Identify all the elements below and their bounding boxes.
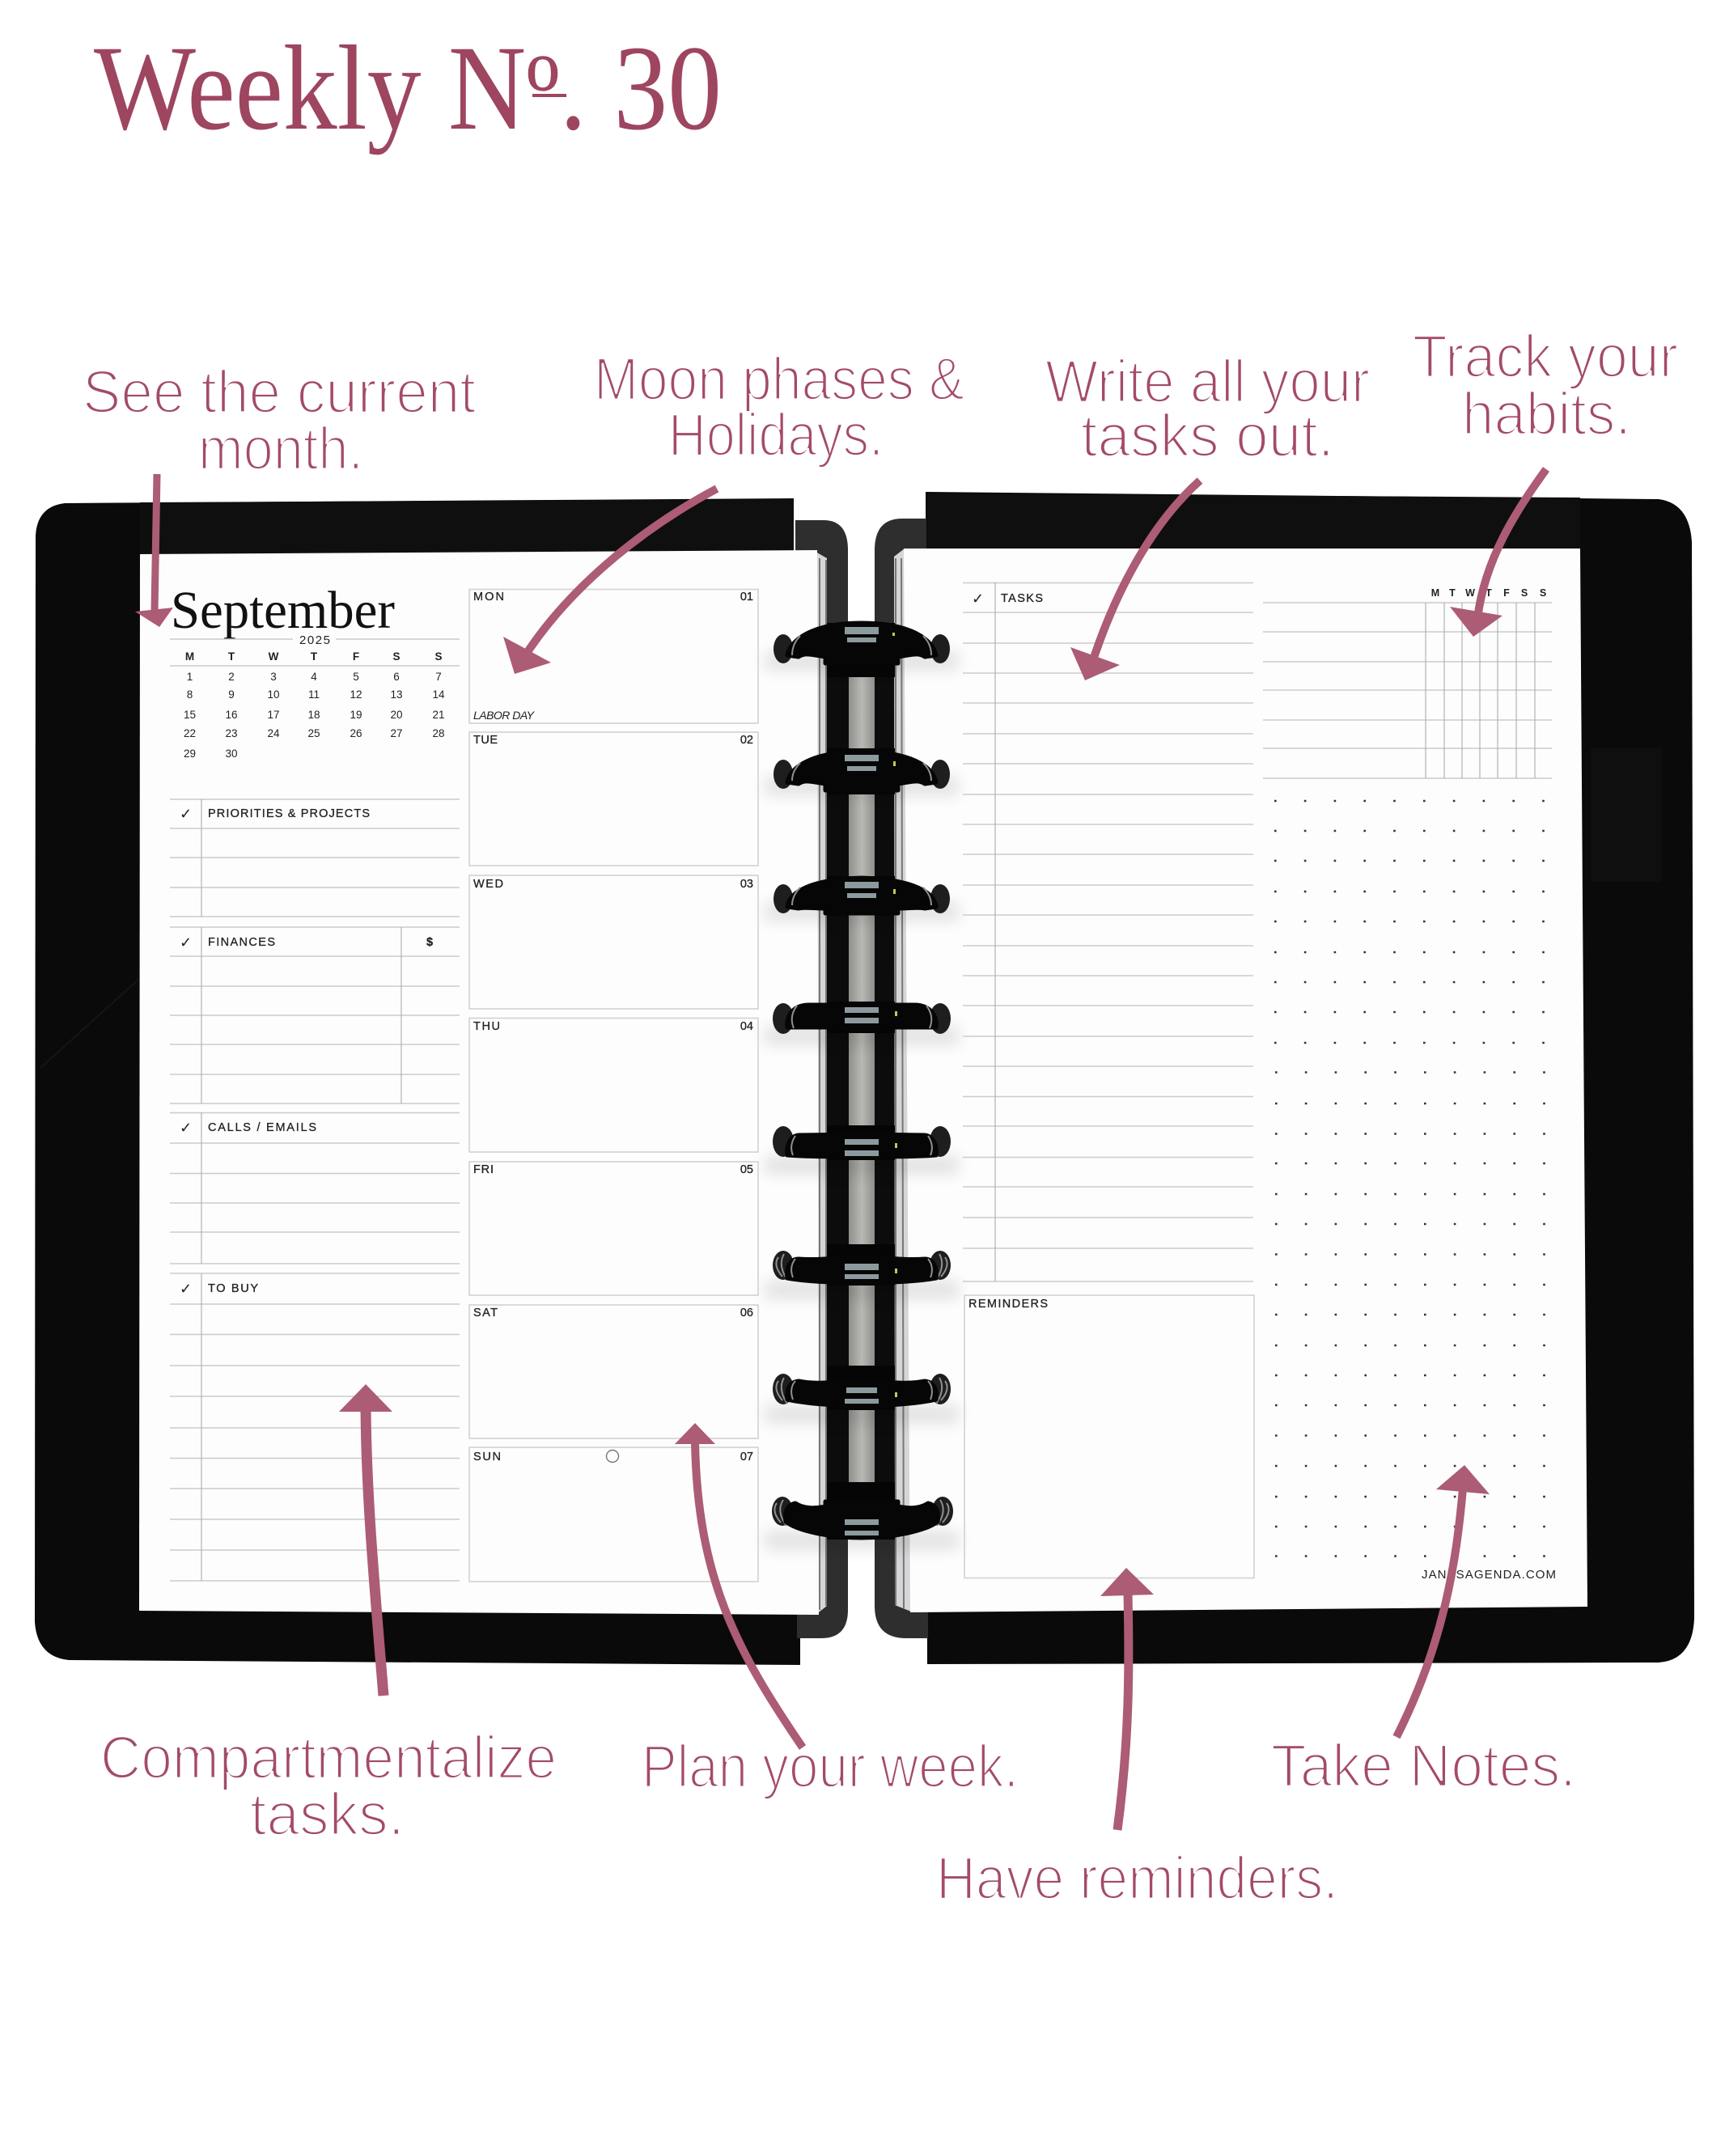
- panel: habit tracker: F: [1503, 587, 1510, 599]
- panel: finances: FINANCES: [208, 936, 275, 949]
- holiday label: LABOR DAY: [473, 709, 536, 722]
- left page: [139, 550, 819, 1615]
- arrow: have reminders: [1100, 1568, 1154, 1830]
- right page: [904, 549, 1587, 1612]
- date grid: 15: [184, 709, 196, 721]
- weekday header: W: [269, 650, 279, 663]
- date grid: 19: [350, 709, 362, 721]
- date grid: 14: [432, 688, 445, 701]
- year: 2025: [299, 633, 330, 647]
- caption: track your habits: [1413, 323, 1678, 447]
- weekday header: S: [392, 650, 401, 663]
- left bracket: [795, 520, 848, 1638]
- date grid: 12: [350, 688, 362, 701]
- elastic strap: [1591, 748, 1662, 882]
- panel: tasks: [963, 582, 1253, 1281]
- date grid: [184, 671, 445, 760]
- title: º: [526, 29, 560, 163]
- planner: open binder: [35, 492, 1694, 1665]
- date grid: 7: [435, 671, 442, 683]
- date grid: 2: [228, 671, 235, 683]
- year rule: [170, 639, 460, 666]
- date grid: 18: [307, 709, 320, 721]
- weekday header: T: [228, 650, 235, 663]
- caption: have reminders: Have reminders.: [936, 1845, 1338, 1912]
- weekday header: T: [311, 650, 318, 663]
- month heading: September: [171, 581, 395, 640]
- panel: Monday: 01: [740, 591, 753, 604]
- panel: habit tracker: S: [1521, 587, 1528, 599]
- date grid: 13: [390, 688, 403, 701]
- caption: track your habits: Track your: [1413, 323, 1678, 390]
- caption: write all your tasks out: tasks out.: [1081, 402, 1334, 469]
- caption: take notes: Take Notes.: [1271, 1732, 1576, 1799]
- panel: habit tracker: S: [1540, 587, 1546, 599]
- weekday header: F: [353, 650, 359, 663]
- date grid: 16: [225, 709, 238, 721]
- panel: Saturday: SAT: [473, 1307, 498, 1319]
- ring 1: [773, 623, 950, 663]
- date grid: 9: [228, 688, 235, 701]
- panel: habit tracker: M: [1431, 587, 1439, 599]
- arrow: take notes: [1397, 1465, 1490, 1737]
- weekday header: M: [185, 650, 194, 663]
- date grid: 8: [187, 688, 193, 701]
- date grid: 3: [270, 671, 277, 683]
- date grid: 23: [225, 727, 238, 739]
- black binder blocks behind rings: [827, 623, 895, 1540]
- panel: calls and emails: CALLS / EMAILS: [208, 1121, 316, 1134]
- panel: Tuesday: TUE: [473, 734, 498, 747]
- date grid: 27: [390, 727, 403, 739]
- panel: habit tracker: W: [1465, 587, 1475, 599]
- panel: Friday: 05: [740, 1163, 753, 1176]
- ring 4: [773, 1003, 951, 1034]
- ring 8: [772, 1497, 953, 1538]
- panel: Thursday: [469, 1018, 758, 1152]
- panel: habit tracker: [1263, 587, 1552, 778]
- ring shadows: [765, 651, 959, 1550]
- caption: compartmentalize tasks: [100, 1724, 557, 1848]
- panel: priorities and projects: [170, 799, 460, 917]
- panel: Sunday: 07: [740, 1451, 753, 1463]
- panel: Tuesday: [469, 732, 758, 866]
- left spine bar: [827, 647, 849, 1525]
- caption: see the current month: month.: [198, 415, 363, 482]
- date grid: 6: [393, 671, 400, 683]
- panel: Friday: [469, 1162, 758, 1295]
- panel: calls and emails: [170, 1112, 460, 1264]
- panel: habit tracker: T: [1449, 587, 1456, 599]
- arrow: write tasks: [1070, 481, 1200, 680]
- caption: compartmentalize tasks: tasks.: [250, 1781, 405, 1848]
- panel: Monday: MON: [473, 591, 504, 604]
- date grid: 29: [184, 748, 196, 760]
- weekday header: [185, 650, 443, 663]
- panel: priorities and projects: ✓: [180, 806, 192, 822]
- weekday header: S: [434, 650, 443, 663]
- caption: compartmentalize tasks: Compartmentalize: [100, 1724, 557, 1791]
- panel: Tuesday: 02: [740, 734, 753, 747]
- panel: Monday: [469, 589, 758, 723]
- ring 7: [773, 1374, 951, 1406]
- panel: Sunday: [469, 1447, 758, 1582]
- panel: priorities and projects: PRIORITIES & PROJECTS: [208, 807, 370, 820]
- panel: finances: [170, 927, 460, 1103]
- right bracket: [875, 519, 928, 1638]
- panel: Wednesday: WED: [473, 878, 503, 891]
- arrow: moon phases: [503, 489, 717, 674]
- panel: Thursday: THU: [473, 1020, 500, 1033]
- arrow: see the current month: [135, 474, 173, 627]
- panel: to buy: [170, 1273, 460, 1581]
- date grid: 11: [308, 688, 320, 701]
- right cover: [926, 492, 1694, 1664]
- panel: calls and emails: ✓: [180, 1120, 192, 1136]
- website: JANESAGENDA.COM: [1422, 1568, 1556, 1582]
- date grid: 20: [390, 709, 403, 721]
- panel: tasks: ✓: [972, 591, 984, 607]
- caption: moon phases and holidays: [594, 345, 964, 468]
- caption: see the current month: [83, 358, 476, 482]
- panel: Wednesday: [469, 875, 758, 1009]
- panel: tasks: TASKS: [1001, 592, 1043, 605]
- left cover top band: [140, 499, 794, 555]
- right cover top band: [927, 493, 1580, 549]
- caption: moon phases and holidays: Moon phases &: [594, 345, 964, 413]
- panel: to buy: TO BUY: [208, 1282, 258, 1295]
- left cover: [35, 498, 800, 1665]
- caption: plan your week: Plan your week.: [642, 1733, 1019, 1800]
- date grid: 17: [267, 709, 280, 721]
- panel: dot grid: [1274, 801, 1546, 1557]
- date grid: 22: [184, 727, 196, 739]
- panel: Wednesday: 03: [740, 878, 753, 891]
- panel: Sunday: SUN: [473, 1451, 501, 1463]
- ring 5: [773, 1126, 951, 1157]
- date grid: 28: [432, 727, 445, 739]
- arrow: track habits: [1450, 469, 1546, 637]
- ring 3: [773, 878, 950, 913]
- date grid: 25: [307, 727, 320, 739]
- spine channel between rings: [849, 663, 875, 1497]
- right page stack: [894, 549, 911, 1612]
- icon: moon phase: [607, 1450, 618, 1463]
- date grid: 10: [267, 688, 280, 701]
- panel: Friday: FRI: [473, 1163, 494, 1176]
- panel: Saturday: 06: [740, 1307, 753, 1319]
- panel: to buy: ✓: [180, 1281, 192, 1297]
- caption: see the current month: See the current: [83, 358, 476, 426]
- date grid: 1: [187, 671, 193, 683]
- panel: finances: ✓: [180, 934, 192, 951]
- date grid: 5: [353, 671, 359, 683]
- right spine bar: [875, 647, 896, 1525]
- caption: track your habits: habits.: [1462, 380, 1631, 447]
- date grid: 26: [350, 727, 362, 739]
- title: . 30: [560, 21, 722, 155]
- panel: Saturday: [469, 1305, 758, 1438]
- caption: write all your tasks out: [1045, 348, 1370, 469]
- panel: reminders: REMINDERS: [968, 1298, 1048, 1311]
- date grid: 21: [432, 709, 445, 721]
- arrow: plan your week: [675, 1423, 803, 1747]
- ring 2: [773, 752, 950, 790]
- caption: moon phases and holidays: Holidays.: [668, 401, 884, 468]
- panel: reminders: [964, 1295, 1254, 1578]
- ring 6: [773, 1251, 951, 1283]
- left pocket seam: [40, 979, 139, 1068]
- arrow: compartmentalize: [339, 1384, 392, 1696]
- panel: habit tracker: T: [1486, 587, 1492, 599]
- title: Weekly N: [94, 21, 579, 155]
- date grid: 4: [311, 671, 317, 683]
- date grid: 30: [225, 748, 238, 760]
- date grid: 24: [267, 727, 280, 739]
- caption: write all your tasks out: Write all your: [1045, 348, 1370, 415]
- panel: Thursday: 04: [740, 1020, 753, 1033]
- left page stack: [816, 552, 827, 1615]
- panel: finances: $: [426, 936, 433, 949]
- mini calendar: [170, 581, 460, 760]
